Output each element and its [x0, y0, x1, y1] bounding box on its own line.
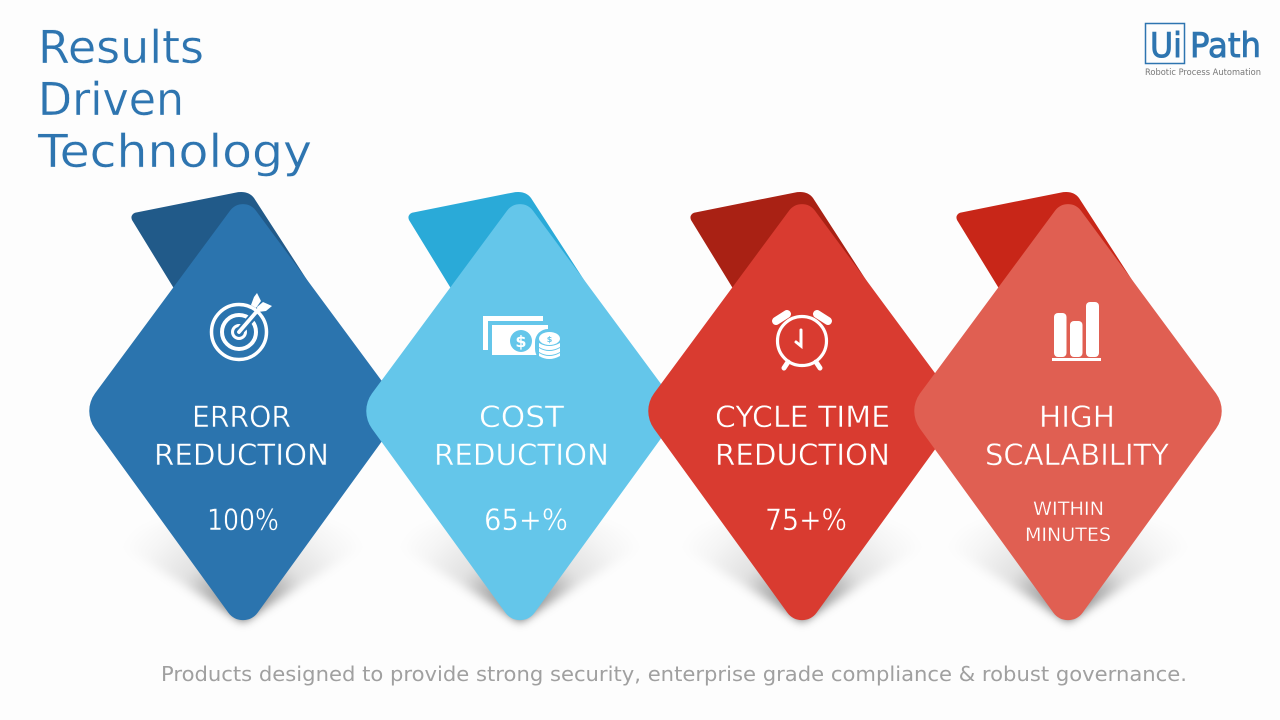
value: MINUTES [1025, 524, 1111, 546]
title: Driven [38, 73, 184, 126]
panel: cycle time reduction [648, 192, 956, 621]
ribbon flap [408, 192, 586, 320]
logo: UiPath: Robotic Process Automation [1145, 68, 1261, 78]
heading: SCALABILITY [985, 438, 1169, 472]
diamond [914, 204, 1222, 620]
logo: UiPath: Path [1190, 26, 1261, 66]
footer text: Products designed to provide strong security, enterprise grade compliance & robust governance. [161, 662, 1187, 686]
value: 65+% [484, 503, 568, 537]
icon: bar chart [1052, 302, 1101, 361]
value: WITHIN [1033, 498, 1104, 520]
panel: high scalability [914, 192, 1222, 621]
heading: REDUCTION [715, 438, 890, 472]
heading [154, 400, 329, 472]
heading: COST [479, 400, 564, 434]
ribbon flap [690, 192, 868, 320]
title: Technology [37, 125, 312, 178]
title: Results [38, 21, 204, 74]
value [1025, 498, 1111, 546]
heading [985, 400, 1169, 472]
heading [715, 400, 890, 472]
logo: UiPath [1145, 24, 1261, 78]
heading [434, 400, 609, 472]
shadow [933, 500, 1203, 621]
icon: alarm clock [776, 314, 828, 368]
panel: cost reduction [366, 192, 674, 621]
icon: target with arrow [212, 293, 272, 360]
value: 75+% [765, 503, 847, 537]
ribbon flap [956, 192, 1134, 320]
value: 100% [207, 503, 279, 537]
icon: money and coins: $ [515, 332, 527, 351]
heading: REDUCTION [154, 438, 329, 472]
diamond [366, 204, 674, 620]
icon: money and coins: $ [547, 335, 553, 344]
ribbon flap [131, 192, 309, 320]
shadow [108, 500, 378, 621]
heading: HIGH [1039, 400, 1115, 434]
diamond [648, 204, 956, 620]
heading: ERROR [192, 400, 291, 434]
shadow [667, 500, 937, 621]
title [37, 21, 312, 178]
heading: CYCLE TIME [715, 400, 890, 434]
heading: REDUCTION [434, 438, 609, 472]
shadow [385, 500, 655, 621]
logo: UiPath: Ui [1150, 26, 1182, 66]
panel: error reduction [89, 192, 397, 621]
diamond [89, 204, 397, 620]
icon: money and coins [483, 316, 563, 362]
